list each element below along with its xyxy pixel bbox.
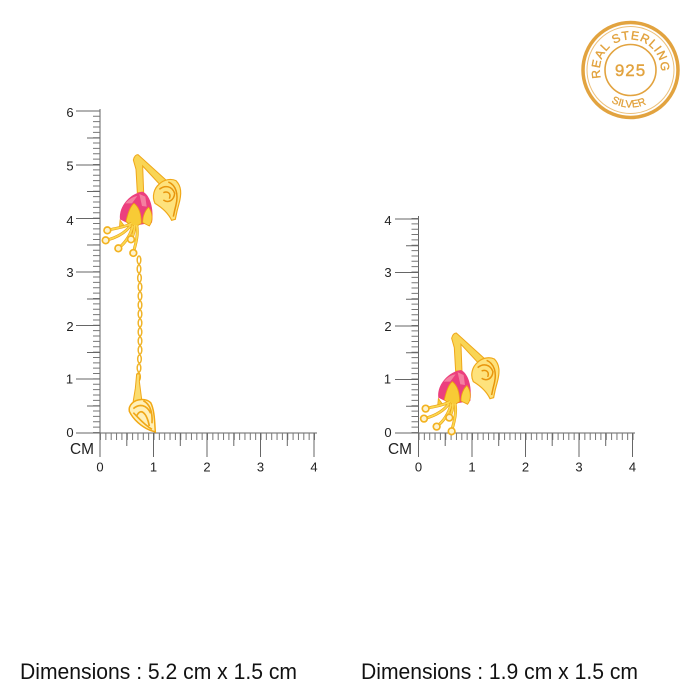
right ruler: 0: [384, 425, 392, 440]
caption: left dimensions: Dimensions : 5.2 cm x 1.5 cm: [20, 659, 297, 684]
right earring: flower drop: [421, 333, 499, 435]
left ruler: 3: [257, 460, 264, 474]
left ruler: 4: [66, 213, 74, 228]
right ruler: CM: [388, 441, 412, 458]
right ruler: 3: [384, 265, 392, 280]
right ruler: 2: [384, 319, 392, 334]
right ruler: 1: [468, 460, 476, 474]
left ruler: [66, 105, 318, 474]
left earring: top flower drop: [102, 155, 181, 256]
right ruler: 4: [629, 460, 636, 474]
right ruler: 1: [384, 372, 391, 386]
badge: real sterling silver 925: 925: [615, 61, 646, 80]
left ruler: 0: [66, 425, 74, 440]
left ruler: 0: [96, 460, 104, 474]
right ruler: [384, 213, 636, 474]
badge: real sterling silver 925: REAL STERLING: [592, 30, 670, 78]
right ruler: 4: [384, 213, 392, 228]
left ruler: 3: [66, 265, 74, 280]
right ruler: 3: [575, 460, 583, 474]
left ruler: 4: [310, 460, 318, 474]
right ruler: 0: [415, 460, 422, 474]
left ruler: 5: [66, 158, 74, 174]
left earring: bottom leaf charm: [129, 374, 155, 432]
caption: right dimensions: Dimensions : 1.9 cm x 1.5 cm: [361, 659, 638, 684]
left ruler: 2: [203, 460, 211, 474]
badge: real sterling silver 925: [581, 20, 680, 120]
left earring: chain: [137, 256, 142, 381]
left ruler: CM: [70, 441, 94, 458]
left ruler: 1: [150, 460, 157, 474]
badge: real sterling silver 925: SILVER: [612, 96, 646, 108]
left ruler: 1: [66, 372, 73, 386]
left ruler: 6: [66, 105, 74, 120]
right ruler: 2: [522, 460, 529, 474]
left ruler: 2: [66, 319, 74, 334]
